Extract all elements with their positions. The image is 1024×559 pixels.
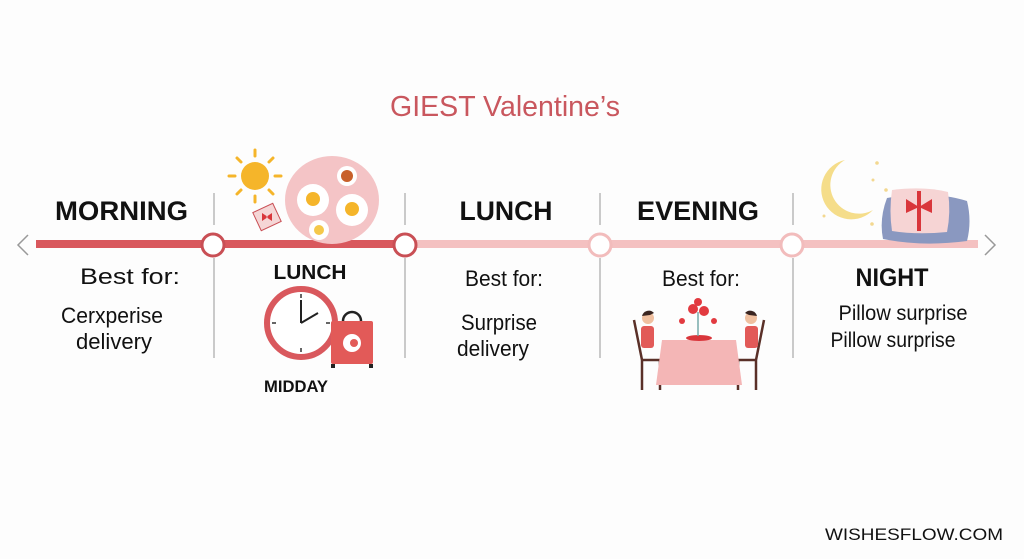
section: lunch [457, 196, 552, 361]
timeline [18, 234, 995, 256]
section: evening: Best for: [662, 266, 740, 291]
section: lunch: Best for: [465, 266, 543, 291]
section: morning: Cerxperise [61, 303, 163, 328]
section: lunch (midday) [264, 262, 373, 396]
title: GIEST Valentine’s [390, 91, 620, 123]
section: night: Pillow surprise [838, 302, 968, 325]
icon: moon and pillow [821, 160, 970, 244]
section: lunch (midday): MIDDAY [264, 377, 329, 396]
section: lunch: delivery [457, 336, 529, 361]
section: evening: EVENING [637, 196, 759, 226]
section: lunch (midday): LUNCH [274, 262, 346, 284]
icon: clock and bag [267, 289, 373, 368]
section: morning [55, 196, 188, 354]
section: night: Pillow surprise [830, 329, 956, 352]
section: lunch: Surprise [461, 310, 537, 335]
footer: brand: WISHESFLOW.COM [825, 525, 1003, 544]
icon: dinner couple [634, 298, 764, 390]
section: morning: delivery [76, 329, 152, 354]
section: night [821, 160, 970, 352]
section: morning: MORNING [55, 196, 188, 226]
section: lunch: LUNCH [460, 196, 552, 226]
section: night: NIGHT [856, 264, 928, 292]
icon: sun and lunch table [229, 150, 379, 244]
section: morning: Best for: [80, 264, 180, 289]
section: evening [634, 196, 764, 390]
dividers [214, 193, 793, 358]
